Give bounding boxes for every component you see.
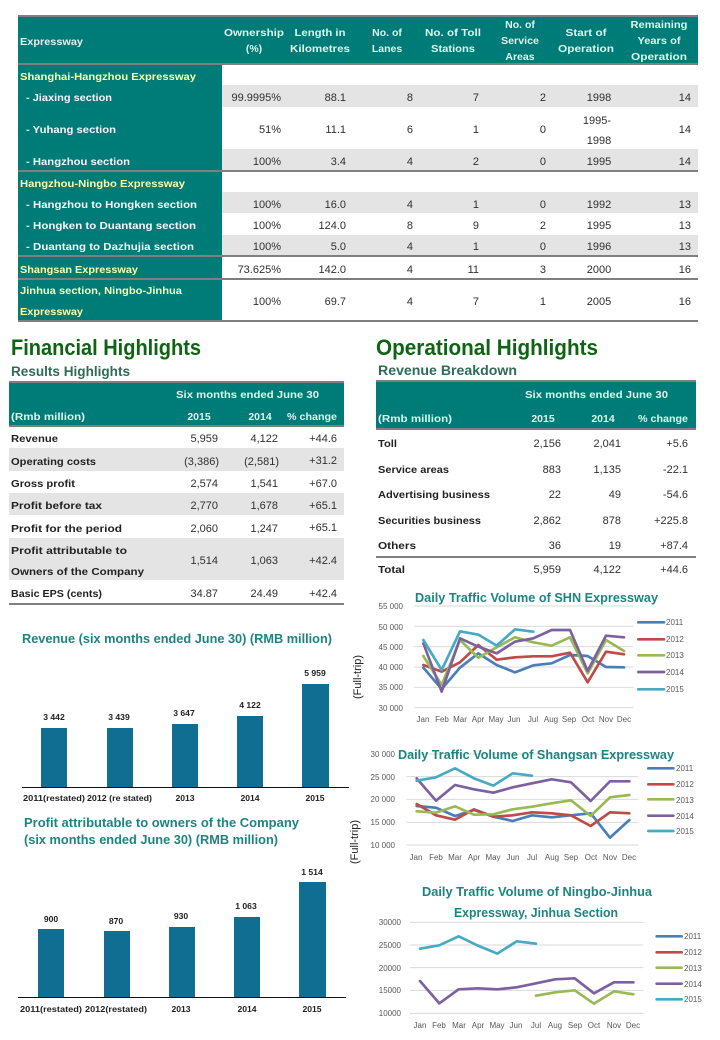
axis labels: Sep (562, 715, 577, 724)
row values: 142.0 (318, 264, 346, 276)
axis labels: Mar (448, 853, 462, 862)
table header row (20, 19, 688, 63)
legend: 2011 (666, 618, 684, 627)
axis labels: Mar (452, 1021, 466, 1030)
rows: Securities business (378, 515, 481, 527)
rows: Operating costs (11, 456, 96, 468)
row values: 1995 (587, 156, 611, 168)
row values: 1996 (587, 241, 611, 253)
bars (41, 684, 329, 788)
axis labels: May (485, 853, 501, 862)
axis labels: Sep (564, 853, 579, 862)
row labels: Shanghai-Hangzhou Expressway (20, 71, 196, 83)
rows: +42.4 (309, 588, 337, 600)
table header row: Expressway (20, 36, 83, 48)
row values: 2 (540, 92, 546, 104)
row values: 0 (540, 241, 546, 253)
rows: 1,247 (250, 523, 278, 535)
row values: 4 (407, 156, 413, 168)
axis labels: May (489, 1021, 505, 1030)
category labels: 2014 (237, 1004, 257, 1014)
axis labels: Aug (545, 853, 559, 862)
row values: 7 (473, 296, 479, 308)
row values: 13 (679, 241, 691, 253)
axis labels: Jan (410, 853, 422, 862)
rows: 2,574 (190, 478, 218, 490)
chart title: Revenue (six months ended June 30) (RMB million) (22, 631, 332, 646)
row values: 1998 (587, 135, 611, 147)
legend: 2014 (684, 980, 702, 989)
rows: 36 (549, 540, 561, 552)
axis labels: Sep (568, 1021, 583, 1030)
axis labels (371, 750, 636, 862)
axis labels: 10 000 (371, 841, 396, 850)
rows: Toll (378, 438, 397, 450)
legend: 2013 (676, 796, 694, 805)
axis labels: 40 000 (379, 663, 404, 672)
axis labels: Jul (527, 853, 537, 862)
row values: 13 (679, 199, 691, 211)
axis labels: Feb (435, 715, 449, 724)
line chart: Shangsan expressway (349, 747, 694, 864)
category labels: 2011(restated) (20, 1004, 82, 1014)
rows: +87.4 (660, 540, 688, 552)
rows: (3,386) (184, 456, 219, 468)
axis unit label: (Full-trip) (349, 820, 361, 864)
row values: 1995- (583, 115, 611, 127)
axis labels: Oct (585, 853, 598, 862)
row values: 4 (407, 241, 413, 253)
rows: 19 (609, 540, 621, 552)
rows: +65.1 (309, 500, 337, 512)
table header row: Length in (294, 27, 346, 39)
table header: 2015 (531, 413, 555, 425)
axis labels: Jan (417, 715, 429, 724)
row values: 8 (407, 220, 413, 232)
rows: 2,862 (533, 515, 561, 527)
axis labels: Apr (472, 715, 485, 724)
axis labels: 35 000 (379, 683, 404, 692)
rows: 22 (549, 489, 561, 501)
category labels: 2015 (305, 793, 325, 803)
table header row: Operation (631, 51, 687, 63)
category labels: 2012(restated) (85, 1004, 147, 1014)
row values (231, 92, 691, 308)
row values: 4 (407, 296, 413, 308)
category labels: 2015 (302, 1004, 322, 1014)
row values: 16.0 (325, 199, 346, 211)
value labels: 1 514 (301, 867, 323, 877)
chart title: Profit attributable to owners of the Company (24, 815, 300, 830)
table header row: Remaining (630, 19, 688, 31)
row values: 0 (540, 124, 546, 136)
rows: 2,770 (190, 500, 218, 512)
row values: 100% (253, 156, 281, 168)
rows: 2,060 (190, 523, 218, 535)
bar chart: profit attributable (18, 815, 346, 1014)
row values: 3 (540, 264, 546, 276)
row values: 11.1 (325, 124, 346, 136)
row values: 14 (679, 92, 691, 104)
rows: 4,122 (250, 433, 278, 445)
axis labels: Apr (472, 1021, 485, 1030)
axis labels: Jun (507, 853, 519, 862)
axis labels: Jan (414, 1021, 426, 1030)
line chart: SHN expressway (352, 590, 684, 724)
axis labels: 50 000 (379, 623, 404, 632)
legend: 2014 (666, 668, 684, 677)
table header: 2014 (248, 411, 272, 423)
axis labels: 30 000 (371, 750, 396, 759)
row values: 2 (540, 220, 546, 232)
table header row: Years of (638, 35, 681, 47)
row labels: Hangzhou-Ningbo Expressway (20, 178, 185, 190)
row values: 4 (407, 199, 413, 211)
row values: 73.625% (238, 264, 281, 276)
axis labels: 20000 (379, 964, 402, 973)
axis labels: 30000 (379, 918, 402, 927)
legend: 2012 (666, 635, 684, 644)
table header row: No. of Toll (425, 27, 481, 39)
value labels: 3 439 (108, 712, 130, 722)
legend: 2012 (676, 780, 694, 789)
row values: 2000 (587, 264, 611, 276)
row values: 69.7 (325, 296, 346, 308)
table header: 2014 (591, 413, 615, 425)
row labels: Jinhua section, Ningbo-Jinhua (20, 285, 182, 297)
row values: 14 (679, 124, 691, 136)
row values: 16 (679, 296, 691, 308)
rows: 1,541 (250, 478, 278, 490)
table header row: Kilometres (290, 43, 350, 55)
rows: +225.8 (654, 515, 688, 527)
subheading: Results Highlights: Results Highlights (11, 364, 130, 379)
row labels: - Duantang to Dazhujia section (26, 241, 194, 253)
table header row: Stations (431, 43, 475, 55)
legend: 2011 (684, 932, 702, 941)
axis labels: 15 000 (371, 818, 396, 827)
row labels (20, 71, 197, 318)
category labels: 2014 (240, 793, 260, 803)
row values: 9 (473, 220, 479, 232)
row values: 2 (473, 156, 479, 168)
table header: (Rmb million) (11, 411, 85, 423)
row values: 124.0 (318, 220, 346, 232)
rows: 1,063 (250, 555, 278, 567)
rows: 878 (603, 515, 621, 527)
axis labels: Aug (544, 715, 558, 724)
table header (378, 389, 688, 425)
rows: Owners of the Company (11, 566, 144, 578)
rows: -22.1 (663, 464, 688, 476)
rows: 1,135 (593, 464, 621, 476)
row values: 4 (407, 264, 413, 276)
row values: 5.0 (331, 241, 346, 253)
rows: -54.6 (663, 489, 688, 501)
legend: 2012 (684, 948, 702, 957)
table header row: Operation (558, 43, 614, 55)
rows: Profit for the period (11, 523, 122, 535)
rows: 5,959 (190, 433, 218, 445)
row values: 1 (473, 199, 479, 211)
rows: Service areas (378, 464, 449, 476)
axis labels (379, 602, 631, 724)
rows: 4,122 (593, 564, 621, 576)
axis labels: Dec (626, 1021, 640, 1030)
legend: 2015 (684, 995, 702, 1004)
row values: 0 (540, 199, 546, 211)
plot lines (407, 754, 673, 845)
table header: (Rmb million) (378, 413, 452, 425)
axis unit label: (Full-trip) (352, 655, 364, 699)
rows: 2,041 (593, 438, 621, 450)
value labels: 5 959 (304, 668, 326, 678)
axis labels: 20 000 (371, 795, 396, 804)
rows: 34.87 (190, 588, 218, 600)
table header: Six months ended June 30 (176, 389, 319, 401)
axis labels: Feb (432, 1021, 446, 1030)
table header row: No. of (505, 19, 535, 31)
legend: 2013 (684, 964, 702, 973)
panel: results highlights table (9, 381, 344, 605)
rows: Basic EPS (cents) (11, 588, 102, 600)
axis labels: Mar (453, 715, 467, 724)
row values: 16 (679, 264, 691, 276)
chart title (24, 815, 300, 847)
legend: 2015 (666, 685, 684, 694)
legend: 2014 (676, 812, 694, 821)
bars (38, 882, 326, 998)
category labels: 2013 (175, 793, 195, 803)
axis labels: Jul (531, 1021, 541, 1030)
axis labels: Dec (622, 853, 636, 862)
rows: 5,959 (533, 564, 561, 576)
row labels: Expressway (20, 306, 83, 318)
row values: 88.1 (325, 92, 346, 104)
axis labels: Nov (603, 853, 617, 862)
rows: +44.6 (309, 433, 337, 445)
axis labels: Jun (508, 715, 520, 724)
axis labels: Nov (599, 715, 613, 724)
heading: Financial Highlights: Financial Highlights (11, 335, 201, 360)
rows: +31.2 (309, 455, 337, 467)
row values: 3.4 (331, 156, 346, 168)
rows (378, 438, 688, 576)
table header row: Lanes (372, 43, 402, 55)
rows: Gross profit (11, 478, 76, 490)
table header row: Ownership (224, 27, 284, 39)
axis labels: Nov (607, 1021, 621, 1030)
row labels: - Hangzhou section (26, 156, 130, 168)
chart title: Daily Traffic Volume of Shangsan Expressway (398, 747, 675, 762)
axis labels: Dec (617, 715, 631, 724)
row values: 1 (540, 296, 546, 308)
value labels (43, 668, 326, 722)
rows: Total (378, 564, 405, 576)
axis labels: Oct (582, 715, 595, 724)
line chart: Ningbo-Jinhua expressway (379, 884, 702, 1030)
rows: Profit before tax (11, 500, 102, 512)
row values: 1995 (587, 220, 611, 232)
row values: 13 (679, 220, 691, 232)
row values: 100% (253, 199, 281, 211)
row values: 1 (473, 241, 479, 253)
category labels: 2011(restated) (23, 793, 85, 803)
value labels: 3 647 (173, 708, 195, 718)
table header: Six months ended June 30 (525, 389, 668, 401)
rows: +65.1 (309, 522, 337, 534)
axis labels: Feb (429, 853, 443, 862)
table header row: Areas (505, 51, 535, 63)
axis labels: 55 000 (379, 602, 404, 611)
rows: +67.0 (309, 478, 337, 490)
row values: 1992 (587, 199, 611, 211)
axis labels: May (488, 715, 504, 724)
row values: 2005 (587, 296, 611, 308)
axis labels: 15000 (379, 986, 402, 995)
rows: Advertising business (378, 489, 490, 501)
rows: 883 (543, 464, 561, 476)
rows: Profit attributable to (11, 545, 127, 557)
rows: 2,156 (533, 438, 561, 450)
axis labels: Aug (548, 1021, 562, 1030)
value labels: 3 442 (43, 712, 65, 722)
table header row: Start of (566, 27, 607, 39)
legend: 2015 (676, 827, 694, 836)
row values: 99.9995% (231, 92, 281, 104)
row values: 11 (468, 264, 479, 276)
legend (666, 618, 684, 694)
bar chart: revenue (22, 631, 349, 803)
row values: 1998 (587, 92, 611, 104)
axis labels: Jul (528, 715, 538, 724)
chart title: Daily Traffic Volume of Ningbo-Jinhua (422, 884, 653, 899)
row values: 100% (253, 296, 281, 308)
axis labels: 25000 (379, 941, 402, 950)
chart title (422, 884, 653, 920)
table header: % change (638, 413, 688, 425)
row labels: - Hangzhou to Hongken section (26, 199, 197, 211)
value labels: 4 122 (239, 700, 261, 710)
table header row: (%) (246, 43, 262, 55)
row values: 6 (407, 124, 413, 136)
category labels (20, 1004, 322, 1014)
heading: Operational Highlights: Operational Highlights (376, 335, 598, 360)
legend (676, 764, 694, 836)
row values: 8 (407, 92, 413, 104)
row labels: - Hongken to Duantang section (26, 220, 196, 232)
row values: 7 (473, 92, 479, 104)
rows: (2,581) (244, 456, 279, 468)
rows: 24.49 (250, 588, 278, 600)
axis labels: 45 000 (379, 643, 404, 652)
row labels: - Yuhang section (26, 124, 116, 136)
subheading: Revenue Breakdown: Revenue Breakdown (378, 363, 517, 378)
rows: 49 (609, 489, 621, 501)
axis labels: 25 000 (371, 773, 396, 782)
panel: revenue breakdown table (376, 380, 696, 576)
row labels: - Jiaxing section (26, 92, 112, 104)
rows: Others (378, 540, 416, 552)
table header row: Service (501, 35, 539, 47)
value labels (44, 867, 323, 926)
rows: Revenue (11, 433, 58, 445)
plot lines (410, 922, 682, 1013)
legend: 2013 (666, 651, 684, 660)
rows: 1,678 (250, 500, 278, 512)
row values: 1 (473, 124, 479, 136)
row values: 100% (253, 241, 281, 253)
category labels: 2013 (171, 1004, 191, 1014)
rows: +42.4 (309, 555, 337, 567)
table header (11, 389, 337, 423)
legend (684, 932, 702, 1004)
rows: +5.6 (666, 438, 688, 450)
chart title: Daily Traffic Volume of SHN Expressway (415, 590, 659, 605)
row values: 100% (253, 220, 281, 232)
axis labels: 10000 (379, 1009, 402, 1018)
axis labels: 30 000 (379, 704, 404, 713)
value labels: 1 063 (235, 901, 257, 911)
axis labels: Apr (468, 853, 481, 862)
category labels (23, 793, 325, 803)
table header row: No. of (372, 27, 402, 39)
chart title: (six months ended June 30) (RMB million) (24, 832, 278, 847)
panel: expressway table (18, 15, 698, 322)
value labels: 930 (174, 911, 188, 921)
axis labels: Oct (588, 1021, 601, 1030)
row labels: Shangsan Expressway (20, 264, 138, 276)
category labels: 2012 (re stated) (87, 793, 152, 803)
axis labels: Jun (510, 1021, 522, 1030)
chart title: Expressway, Jinhua Section (454, 905, 618, 920)
rows: +44.6 (660, 564, 688, 576)
row values: 0 (540, 156, 546, 168)
rows: 1,514 (190, 555, 218, 567)
row values: 51% (259, 124, 281, 136)
table header: % change (287, 411, 337, 423)
value labels: 900 (44, 914, 58, 924)
legend: 2011 (676, 764, 694, 773)
row values: 14 (679, 156, 691, 168)
plot lines (414, 606, 664, 708)
value labels: 870 (109, 916, 123, 926)
table header: 2015 (187, 411, 211, 423)
axis labels (379, 918, 640, 1030)
rows (11, 433, 337, 600)
